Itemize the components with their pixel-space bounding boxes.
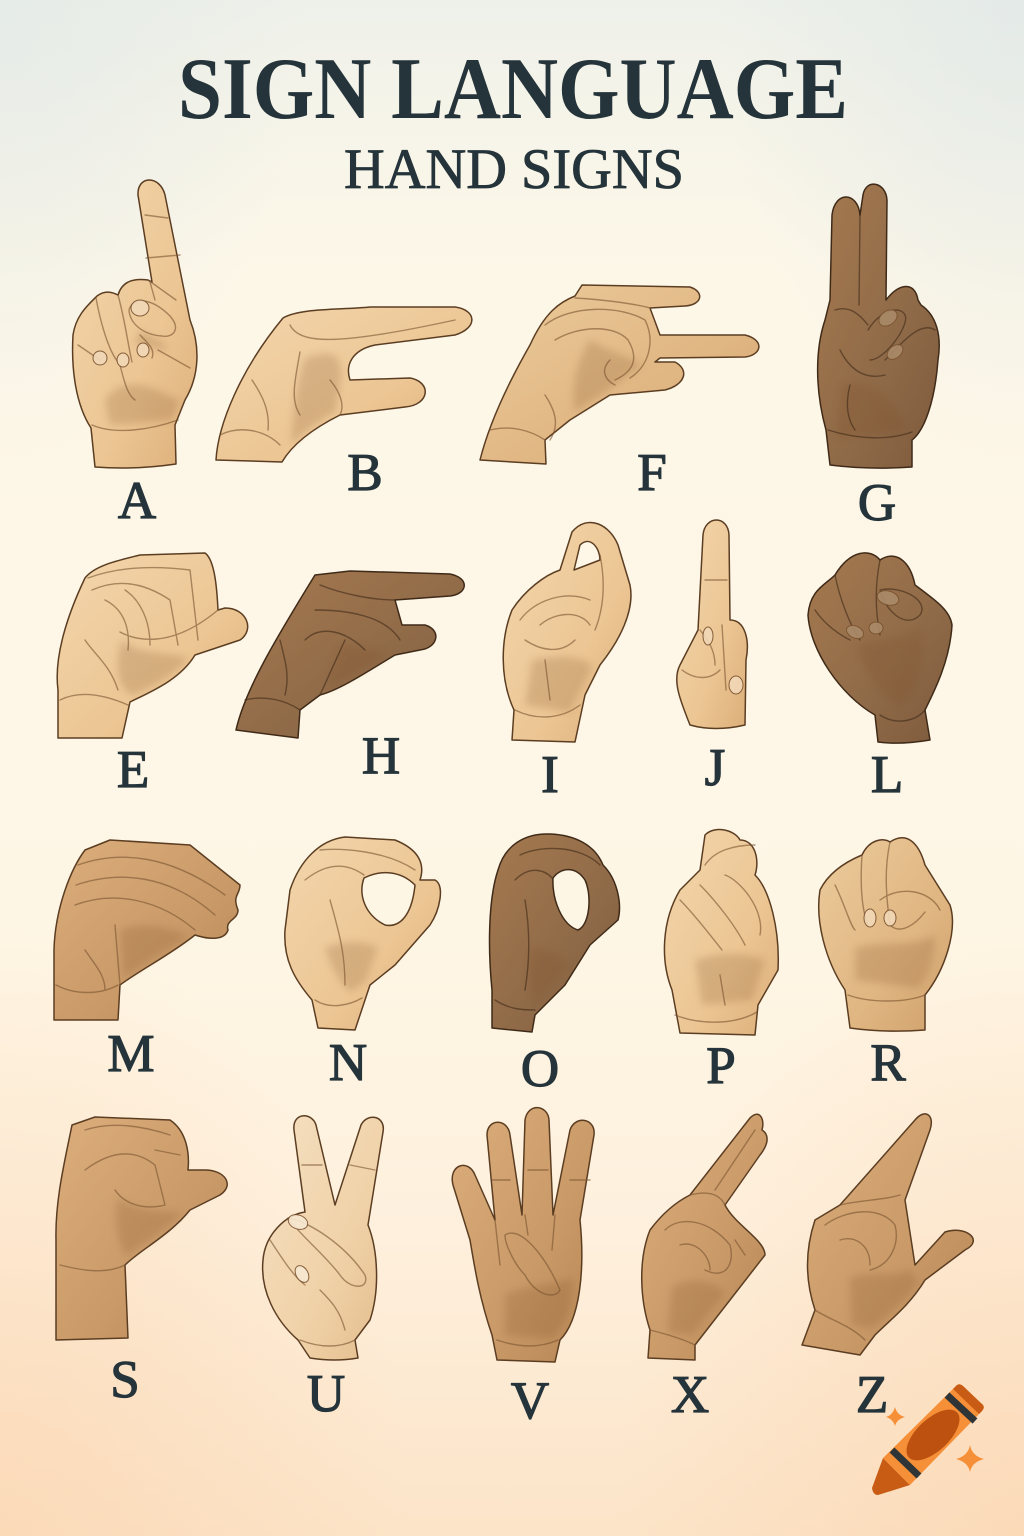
letter E: E: [117, 741, 149, 799]
letter F: F: [637, 444, 667, 502]
letter J: J: [705, 739, 725, 797]
letter X: X: [671, 1366, 709, 1424]
icon: hand L: [808, 553, 952, 743]
letter R: R: [870, 1034, 906, 1092]
sign: V: [452, 1108, 594, 1430]
sign: E: [57, 553, 248, 799]
letter P: P: [706, 1037, 736, 1095]
letter N: N: [329, 1034, 367, 1092]
icon: hand F: [480, 285, 759, 464]
sign: A: [73, 180, 197, 530]
sign: O: [490, 834, 619, 1098]
letter U: U: [307, 1365, 345, 1423]
crayon body: [883, 1384, 984, 1485]
icon: hand A: [73, 180, 197, 468]
icon: hand U: [263, 1116, 383, 1360]
icon: crayon logo: [872, 1384, 984, 1495]
letter M: M: [107, 1025, 155, 1083]
icon: hand R: [819, 838, 952, 1031]
sign: G: [818, 184, 939, 532]
letter V: V: [511, 1372, 549, 1430]
icon: hand O: [490, 834, 619, 1032]
icon: hand B: [216, 307, 472, 462]
letter B: B: [347, 444, 383, 502]
letter O: O: [521, 1040, 559, 1098]
icon: hand I: [503, 522, 631, 742]
sparkle right: [956, 1445, 984, 1472]
sign: P: [664, 830, 778, 1095]
icon: hand S: [56, 1117, 227, 1340]
crayon bands: [892, 1395, 975, 1476]
crayon tip: [872, 1458, 910, 1495]
icon: hand E: [57, 553, 248, 738]
icon: hand M: [54, 840, 240, 1020]
icon: hand G: [818, 184, 939, 468]
letter H: H: [362, 727, 400, 785]
icon: hand V: [452, 1108, 594, 1362]
sign: M: [54, 840, 240, 1083]
subtitle: HAND SIGNS: [344, 138, 684, 201]
icon: hand Z: [802, 1114, 973, 1355]
sign: I: [503, 522, 631, 804]
icon: hand X: [642, 1114, 767, 1360]
letter L: L: [871, 746, 903, 804]
icon: hand H: [236, 571, 464, 738]
letter A: A: [118, 472, 156, 530]
sign: N: [285, 837, 440, 1092]
letter Z: Z: [856, 1366, 888, 1424]
sign: F: [480, 285, 759, 502]
sign: U: [263, 1116, 383, 1423]
sign: S: [56, 1117, 227, 1409]
sign: Z: [802, 1114, 973, 1424]
icon: hand J: [677, 520, 747, 728]
icon: hand N: [285, 837, 440, 1030]
icon: hand P: [664, 830, 778, 1035]
letter S: S: [110, 1351, 140, 1409]
letter G: G: [858, 474, 896, 532]
title: SIGN LANGUAGE: [178, 41, 848, 138]
sparkle left: [886, 1407, 905, 1426]
letter I: I: [541, 746, 559, 804]
sign: X: [642, 1114, 767, 1424]
sign: R: [819, 838, 952, 1092]
sign: B: [216, 307, 472, 502]
sign: L: [808, 553, 952, 804]
sign: J: [677, 520, 747, 797]
sign: H: [236, 571, 464, 785]
crayon oval: [898, 1401, 968, 1469]
